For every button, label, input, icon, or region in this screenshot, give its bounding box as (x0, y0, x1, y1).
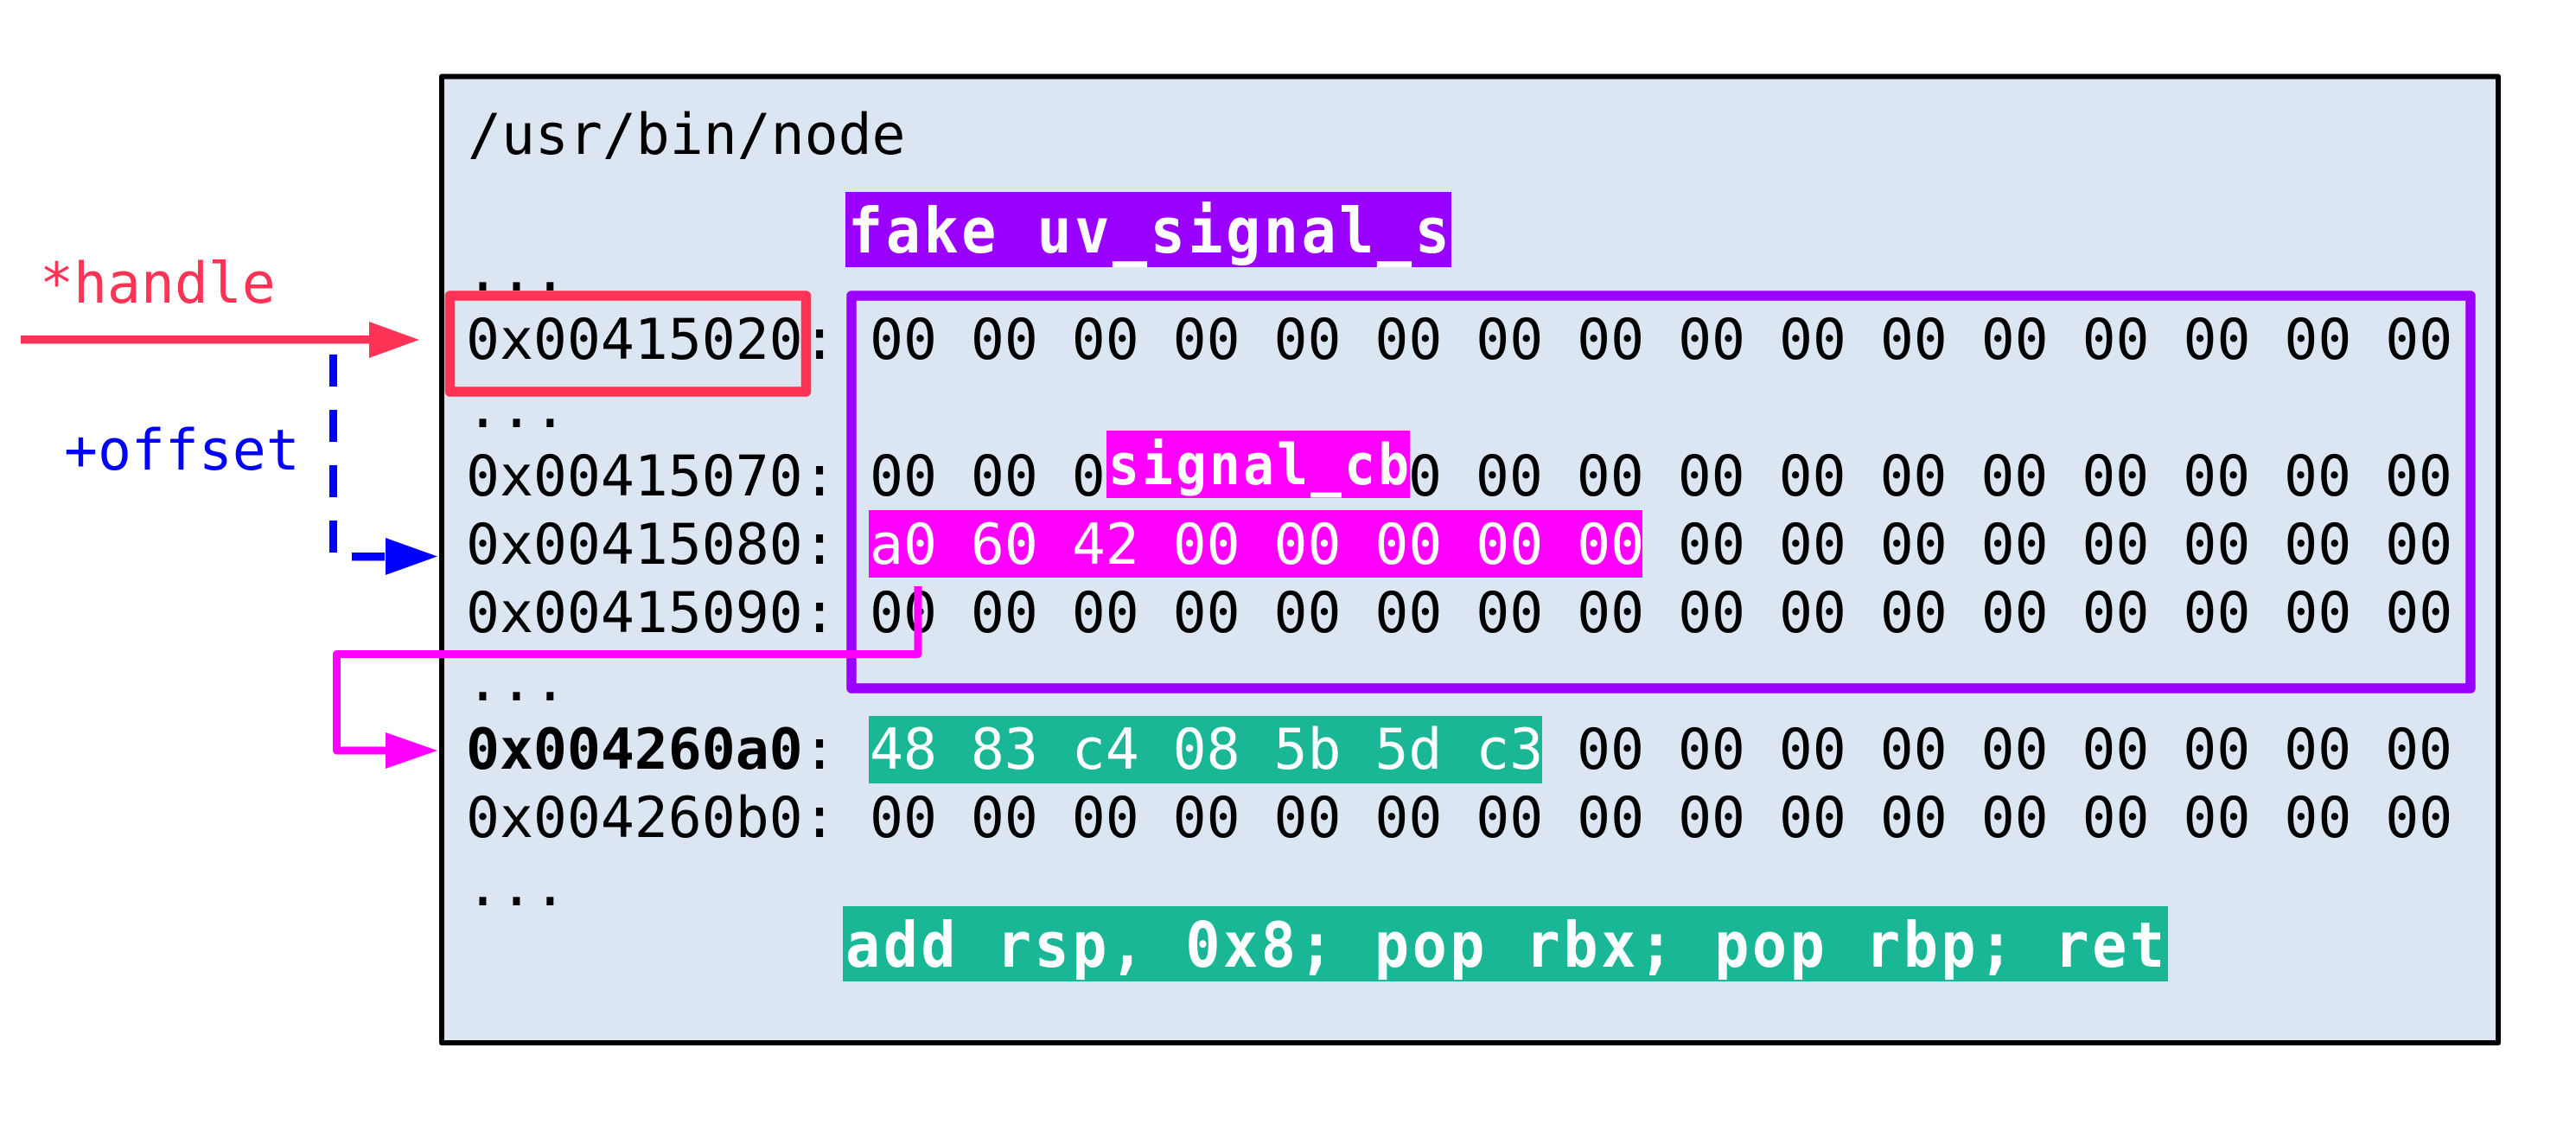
row 0x004260b0: 0x004260b0: (466, 786, 837, 851)
row 0x00415080 with highlighted pointer: a0 60 42 00 00 00 00 00 (870, 513, 1644, 578)
label: *handle: *handle (40, 252, 276, 316)
outline: handle address (450, 296, 806, 392)
label: +offset: +offset (64, 419, 300, 483)
row 0x00415070: 0 00 00 00 00 00 00 00 00 00 00 (1408, 444, 2452, 509)
binary path heading: /usr/bin/node (468, 103, 906, 168)
arrow: signal_cb pointer to gadget (337, 586, 918, 769)
row 0x00415070 (466, 444, 2452, 509)
label: gadget instructions: add rsp, 0x8; pop rbx; pop rbp; ret (845, 909, 2168, 982)
outline: fake uv_signal_s struct (851, 296, 2471, 688)
row 0x004260a0 with highlighted gadget bytes: 48 83 c4 08 5b 5d c3 (870, 718, 1543, 783)
memory dump rows (466, 240, 2452, 919)
ellipsis row 4: ... (466, 854, 567, 919)
ellipsis row: ... (466, 240, 567, 304)
row 0x004260a0 with highlighted gadget bytes: 0x004260a0: (466, 718, 837, 783)
panel: /usr/bin/node memory dump (442, 76, 2498, 1043)
row 0x004260a0 with highlighted gadget bytes: 00 00 00 00 00 00 00 00 00 (1577, 718, 2452, 783)
arrow: handle pointer (21, 322, 419, 358)
row 0x00415070: 00 00 0 (870, 444, 1106, 509)
ellipsis row 2: ... (466, 376, 567, 441)
arrow: offset dashed (329, 355, 437, 575)
row 0x00415020: 00 00 00 00 00 00 00 00 00 00 00 00 00 00 00 00 (870, 308, 2452, 373)
ellipsis row 3: ... (466, 649, 567, 714)
label: signal_cb: signal_cb (1108, 432, 1412, 498)
row 0x00415080 with highlighted pointer (466, 510, 2452, 578)
row 0x00415070: 0x00415070: (466, 444, 837, 509)
row 0x00415090: 00 00 00 00 00 00 00 00 00 00 00 00 00 00 00 00 (870, 581, 2452, 646)
row 0x004260b0: 00 00 00 00 00 00 00 00 00 00 00 00 00 00 00 00 (870, 786, 2452, 851)
row 0x00415020: 0x00415020: (466, 308, 837, 373)
row 0x004260a0 with highlighted gadget bytes (466, 716, 2452, 783)
label: fake uv_signal_s: fake uv_signal_s (848, 195, 1452, 268)
row 0x00415080 with highlighted pointer: 0x00415080: (466, 513, 837, 578)
row 0x00415090: 0x00415090: (466, 581, 837, 646)
row 0x00415080 with highlighted pointer: 00 00 00 00 00 00 00 00 (1678, 513, 2452, 578)
